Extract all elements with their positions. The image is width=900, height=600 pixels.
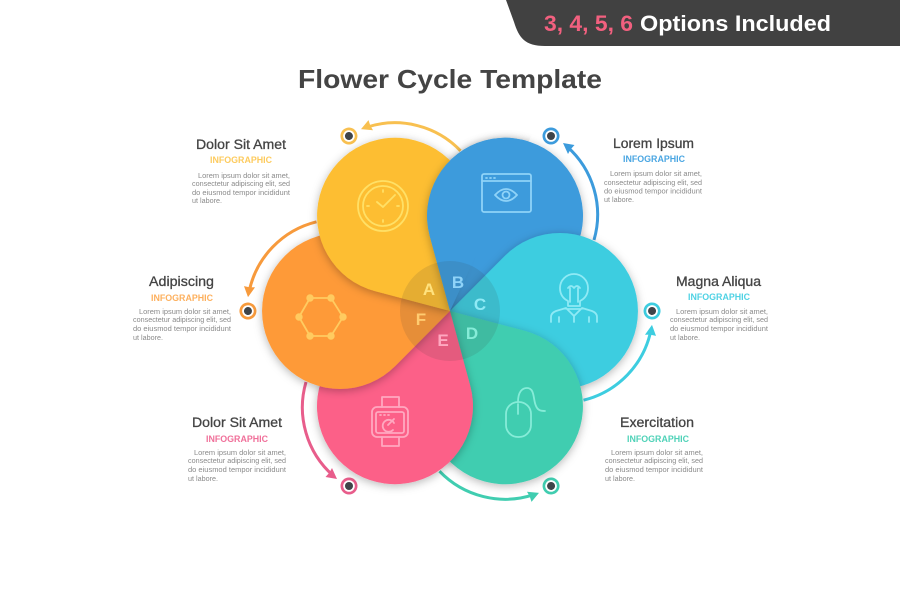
text block: cyan: ut labore. [670,335,700,342]
text block: green: INFOGRAPHIC [627,434,689,444]
icon: clock [358,181,408,231]
letter F: F [416,310,426,329]
letter C: C [474,295,486,314]
text block: cyan: INFOGRAPHIC [688,292,750,302]
letter A: A [423,280,435,299]
header banner [506,0,900,46]
text block: yellow: consectetur adipiscing elit, sed [192,181,290,188]
text block: yellow: Lorem ipsum dolor sit amet, [198,173,290,180]
text block: pink: INFOGRAPHIC [206,434,268,444]
text block: pink: Dolor Sit Amet [192,415,282,430]
letter D: D [466,324,478,343]
arrow: blue [542,128,598,240]
header banner: Options Included [640,11,831,36]
arrow: orange [217,219,342,323]
arrow: pink [302,382,358,494]
icon: light bulb person [551,274,597,322]
text block: blue: ut labore. [604,197,634,204]
petal: orange [234,196,461,418]
text block: orange: Adipiscing [149,274,214,289]
text block: green: ut labore. [605,476,635,483]
petal: yellow [289,109,517,331]
text block: yellow: do eiusmod tempor incididunt [192,190,290,197]
text block: pink: ut labore. [188,476,218,483]
letter E: E [437,331,449,350]
petal: blue [427,138,583,311]
text block: blue: INFOGRAPHIC [623,154,685,164]
icon: mouse [506,388,545,437]
text block: yellow: ut labore. [192,198,222,205]
letter B: B [452,273,464,292]
title: Flower Cycle Template [298,64,602,94]
arrow: green [438,427,563,531]
text block: orange: ut labore. [133,335,163,342]
text block: pink: Lorem ipsum dolor sit amet, [194,450,286,457]
text block: yellow: Dolor Sit Amet [196,137,286,152]
icon: hexagon [296,295,346,339]
center circle [400,261,500,361]
text block: orange [133,274,231,342]
text block: cyan: consectetur adipiscing elit, sed [670,317,768,324]
text block: blue: Lorem ipsum dolor sit amet, [610,171,702,178]
petal: green [383,291,611,513]
text block: cyan: Magna Aliqua [676,274,762,289]
text block: cyan: Lorem ipsum dolor sit amet, [676,309,768,316]
text block: yellow: INFOGRAPHIC [210,155,272,165]
text block: green: consectetur adipiscing elit, sed [605,458,703,465]
text block: pink: do eiusmod tempor incididunt [188,467,286,474]
petal: pink [317,311,473,484]
icon: browser window with eye [482,174,531,212]
text block: orange: consectetur adipiscing elit, sed [133,317,231,324]
text block: green [605,415,703,483]
text block: blue: do eiusmod tempor incididunt [604,188,702,196]
text block: green: Exercitation [620,415,694,430]
text block: cyan: do eiusmod tempor incididunt [670,326,768,333]
text block: orange: INFOGRAPHIC [151,293,213,303]
text block: pink [188,415,286,483]
text block: pink: consectetur adipiscing elit, sed [188,458,286,465]
petal: blue overlap over yellow [422,135,530,311]
text block: orange: Lorem ipsum dolor sit amet, [139,309,231,316]
header banner: 3, 4, 5, 6 [544,11,633,36]
arrow: cyan [558,299,683,403]
text block: green: Lorem ipsum dolor sit amet, [611,450,703,457]
text block: blue: Lorem Ipsum [613,136,694,151]
text block: orange: do eiusmod tempor incididunt [133,326,231,333]
text block: blue: consectetur adipiscing elit, sed [604,180,702,187]
text block: blue [604,136,702,204]
icon: smartwatch [372,397,408,446]
petal: cyan [439,204,666,426]
text block: yellow [192,137,290,205]
text block: green: do eiusmod tempor incididunt [605,467,703,474]
text block: cyan [670,274,768,342]
arrow: yellow [337,91,462,195]
